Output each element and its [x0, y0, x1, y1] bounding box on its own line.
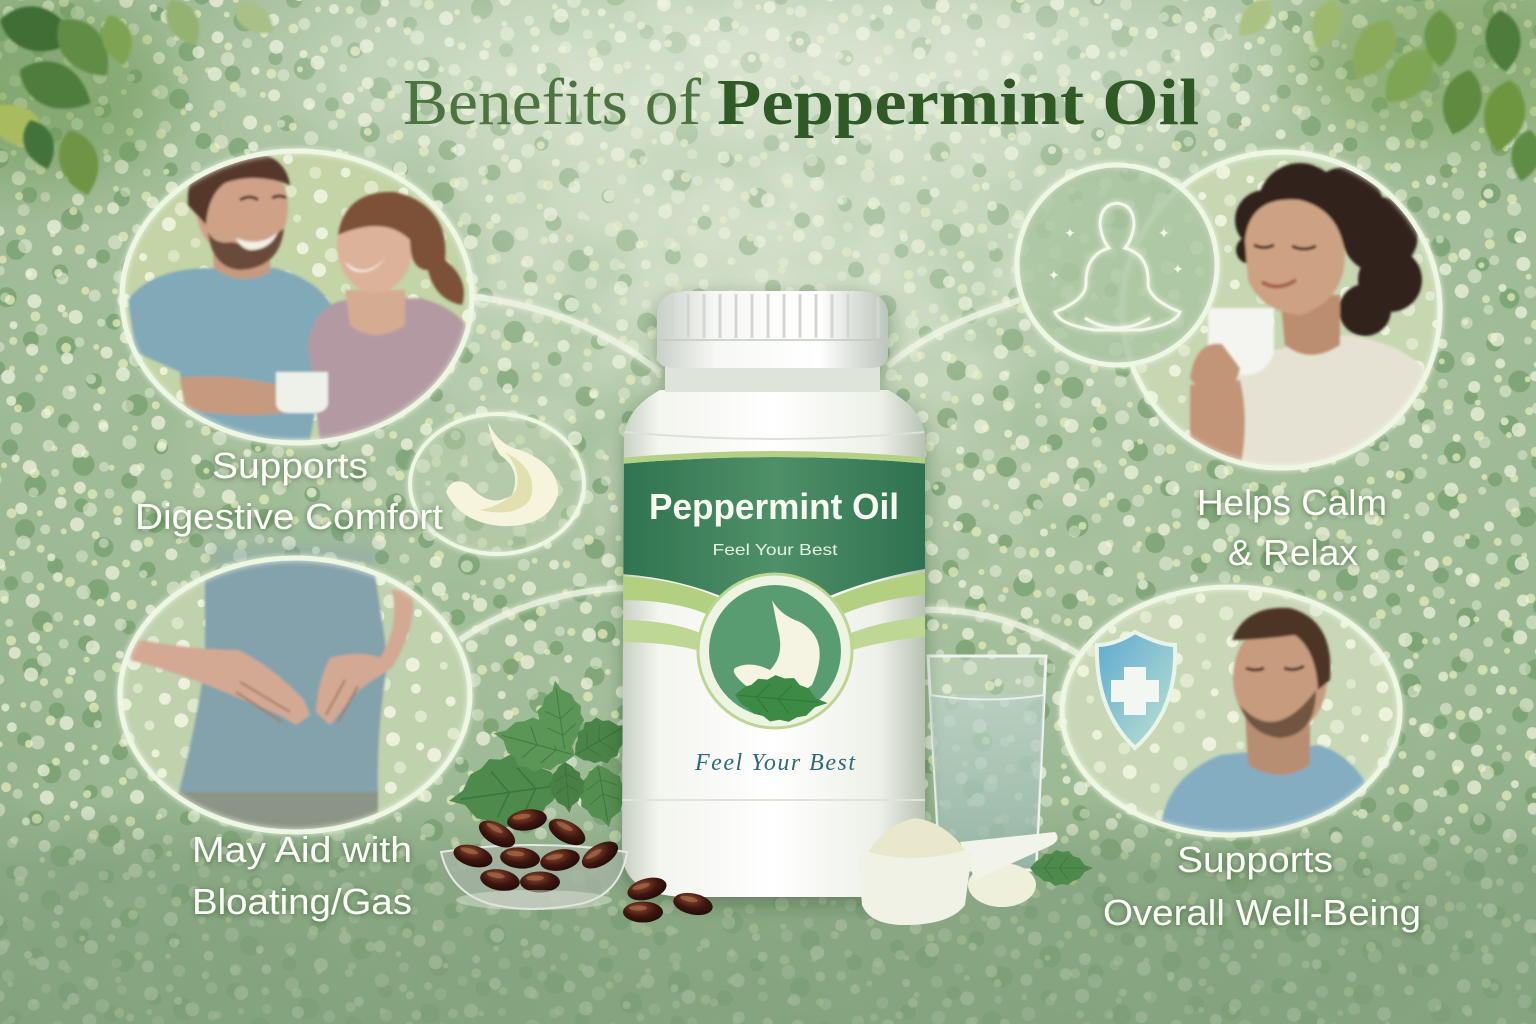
label: may aid with bloating/gas: [192, 829, 412, 922]
label: supports digestive comfort: Supports: [212, 445, 368, 486]
man: [128, 150, 334, 440]
arm and mug: [180, 372, 328, 415]
foliage: top-right corner leaves: [1230, 0, 1536, 184]
mint sprig: [444, 677, 639, 838]
bottle neck: [665, 362, 880, 392]
woman: [308, 192, 472, 440]
label: helps calm and relax: Helps Calm: [1197, 482, 1387, 523]
label: supports digestive comfort: Digestive Comfort: [135, 496, 443, 537]
panel: well-being man: [1060, 585, 1405, 840]
title: Peppermint Oil: [717, 66, 1199, 139]
icon: meditation figure in circle: ✦: [1048, 267, 1060, 283]
foliage: top-left corner leaves: [0, 0, 281, 200]
label emblem: stomach with mint: [698, 574, 852, 728]
bottle cap: [657, 291, 888, 368]
label: supports digestive comfort: [135, 445, 443, 537]
icon: meditation figure in circle: ✦: [1158, 225, 1170, 241]
icon: meditation figure in circle: ✦: [1172, 261, 1184, 277]
cup: [1208, 308, 1274, 375]
torso in blue-grey shirt: [178, 555, 388, 795]
title: Benefits of: [403, 66, 701, 139]
icon: health shield with cross: [1097, 632, 1175, 748]
label: may aid with bloating/gas: Bloating/Gas: [192, 881, 412, 922]
hands on abdomen: [130, 590, 413, 725]
bottle: [620, 291, 930, 897]
sweater: [1236, 333, 1425, 466]
bottle body: [622, 390, 925, 897]
label: supports overall well-being: Overall Well-Being: [1103, 892, 1421, 933]
panel: calm woman with cup: [1120, 150, 1450, 480]
neck: [1280, 295, 1340, 355]
panel: digestive comfort couple: [120, 150, 480, 450]
panel: bloating / gas person: [120, 530, 480, 840]
curly hair: [1235, 163, 1422, 336]
icon: meditation figure in circle: [1017, 165, 1217, 365]
water glass: [928, 656, 1046, 870]
label: helps calm and relax: [1197, 482, 1387, 573]
hand on cup: [1189, 342, 1242, 386]
label green band: [620, 457, 930, 600]
script tagline: Feel Your Best: [694, 750, 856, 776]
label: supports overall well-being: [1103, 839, 1421, 933]
label: helps calm and relax: & Relax: [1228, 532, 1358, 573]
label: supports overall well-being: Supports: [1177, 839, 1333, 880]
label subtitle: Feel Your Best: [712, 542, 838, 559]
label: may aid with bloating/gas: May Aid with: [192, 829, 412, 870]
face: [1245, 200, 1345, 315]
label title: Peppermint Oil: [649, 486, 899, 527]
measuring scoop with powder: [858, 818, 1093, 925]
lime stripes: [623, 572, 925, 614]
loose capsules: [623, 874, 715, 922]
bowl of softgel capsules: [441, 807, 627, 910]
icon: stomach in circle: [410, 414, 584, 554]
icon: meditation figure in circle: ✦: [1064, 225, 1076, 241]
connector lines: [460, 296, 1080, 655]
title: [403, 66, 1199, 139]
arm: [1190, 380, 1245, 470]
